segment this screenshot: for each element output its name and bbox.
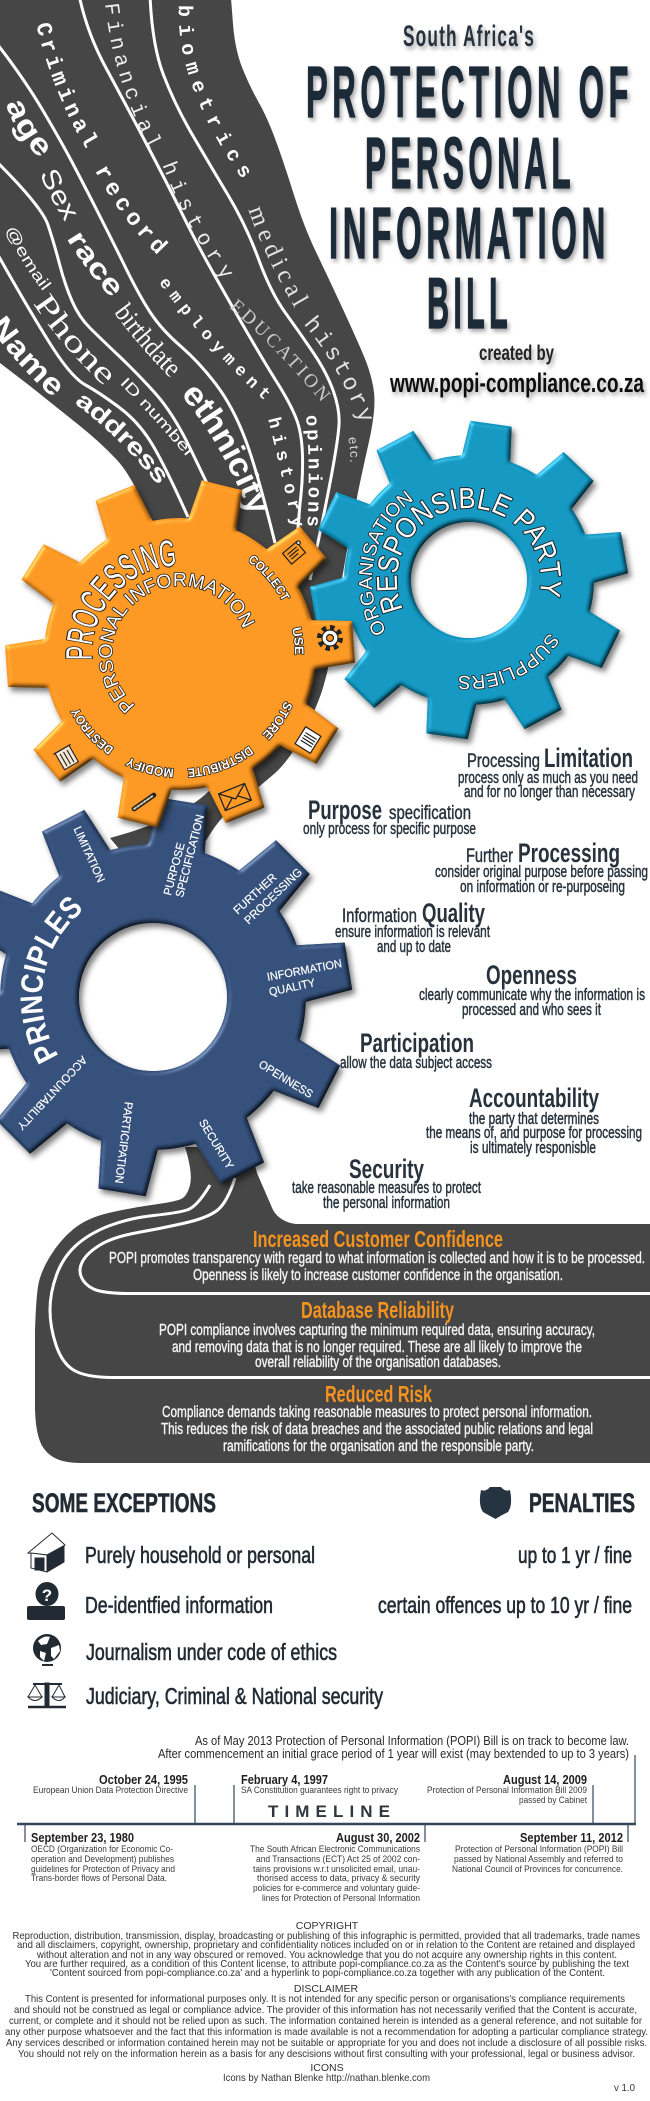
gear shape — [309, 420, 629, 740]
principle: further processing — [435, 838, 648, 896]
event: september 11 2012: National Council of Provinces for concurrence. — [452, 1864, 623, 1875]
step labels: STORE — [262, 701, 292, 741]
heading: some exceptions: SOME EXCEPTIONS — [32, 1488, 216, 1518]
panel: timeline — [17, 1734, 636, 1904]
disclaimer: DISCLAIMER — [294, 1983, 359, 1995]
event: september 11 2012: Protection of Personal Information (POPI) Bill — [455, 1844, 623, 1855]
ribbon words: record — [96, 166, 168, 254]
ribbon shape — [35, 1147, 650, 1463]
principle: participation — [340, 1028, 492, 1072]
event: september 23 1980: guidelines for Protection of Privacy and — [31, 1864, 175, 1875]
version: v 1.0 — [614, 2082, 635, 2094]
event: august 30 2002: policies for e-commerce and voluntary guide- — [253, 1883, 420, 1894]
event: august 30 2002: The South African Electronic Communications — [250, 1844, 420, 1855]
principle: accountability: is ultimately responisble — [470, 1139, 596, 1157]
principle: accountability — [426, 1083, 642, 1157]
stream shape — [0, 0, 374, 850]
tooth labels: SPECIFICATION — [174, 813, 207, 899]
gear shape — [5, 479, 355, 829]
step labels: MODIFY — [124, 758, 174, 778]
icon credits — [223, 2062, 430, 2084]
event: august 30 2002 — [250, 1831, 420, 1904]
event: august 14 2009: August 14, 2009 — [503, 1773, 587, 1787]
ribbon words: @email — [6, 228, 52, 290]
event: february 4 1997: SA Constitution guarantees right to privacy — [241, 1785, 398, 1796]
event: august 14 2009: Protection of Personal Information Bill 2009 — [427, 1785, 587, 1796]
ribbon words: employment — [160, 279, 270, 400]
principle: openness — [419, 960, 645, 1019]
principle: purpose specification: only process for specific purpose — [303, 820, 476, 838]
principle: security: Security — [349, 1154, 424, 1184]
event: august 14 2009 — [427, 1773, 587, 1806]
icon: anonymous person: ? — [42, 1586, 52, 1605]
exception: judiciary: Judiciary, Criminal & National security — [86, 1683, 383, 1709]
gear heading: processing: PROCESSING — [65, 539, 176, 659]
icon: house — [28, 1533, 65, 1572]
gear heading: principles: PRINCIPLES — [20, 897, 81, 1064]
ribbon words: Financial — [105, 4, 162, 148]
ribbon words — [0, 4, 372, 526]
disclaimer — [5, 1983, 648, 2060]
principle: processing limitation: Processing — [467, 751, 540, 772]
timeline heading: TIMELINE — [268, 1802, 390, 1821]
event: august 30 2002: August 30, 2002 — [336, 1831, 420, 1845]
icon: scales of justice — [28, 1683, 66, 1707]
gear labels: SUPPLIERS — [458, 634, 559, 690]
icon credits: Icons by Nathan Blenke http://nathan.blenke.com — [223, 2072, 430, 2084]
panel: principle descriptions — [292, 743, 648, 1212]
event: september 23 1980 — [31, 1831, 175, 1884]
event: september 23 1980: Trans-border flows of Personal Data. — [31, 1873, 167, 1884]
event: september 11 2012 — [452, 1831, 623, 1875]
ribbon words: history — [304, 314, 372, 419]
event: february 4 1997 — [241, 1773, 398, 1796]
icon: shield — [480, 1487, 511, 1519]
tooth labels: INFORMATION — [266, 958, 343, 984]
event: august 30 2002: lines for Protection of Personal Information — [262, 1893, 420, 1904]
tooth labels — [14, 813, 343, 1184]
exception: journalism: Journalism under code of ethics — [86, 1639, 337, 1665]
principle: accountability: the party that determines — [469, 1110, 599, 1128]
tooth labels: FURTHER — [232, 872, 279, 917]
principle: security — [292, 1154, 481, 1212]
icon credits: ICONS — [310, 2062, 344, 2074]
icon: distribute envelope — [219, 783, 251, 811]
gear labels: ORGANISATION — [358, 490, 414, 636]
ribbon words: Sex — [42, 170, 76, 222]
tooth labels: SECURITY — [196, 1117, 235, 1172]
copyright: COPYRIGHT — [296, 1920, 359, 1932]
ribbon words: EDUCATION — [230, 298, 331, 401]
panel: penalties — [378, 1487, 635, 1618]
principle: openness: Openness — [486, 960, 577, 990]
copyright: 'Content sourced from popi-compliance.co.za' and a hyperlink to popi-compliance.co.za together with any publication of the Content. — [50, 1967, 605, 1979]
step labels: DISTRIBUTE — [186, 746, 254, 778]
title: Protection of Personal Information Bill: BILL — [427, 264, 512, 344]
ribbon words: history — [268, 417, 302, 526]
tooth labels: QUALITY — [268, 977, 317, 999]
title: Protection of Personal Information Bill — [306, 53, 633, 344]
ribbon words: etc. — [348, 438, 358, 462]
event: september 23 1980: OECD (Organization for Economic Co- — [31, 1844, 173, 1855]
principle: participation: allow the data subject access — [340, 1054, 492, 1072]
benefit: database reliability: Database Reliability — [301, 1297, 454, 1323]
event: october 24 1995 — [33, 1773, 188, 1796]
benefit: reduced risk: Reduced Risk — [325, 1381, 432, 1407]
event: october 24 1995: October 24, 1995 — [99, 1773, 188, 1787]
intro text — [158, 1734, 629, 1761]
event: september 11 2012: September 11, 2012 — [520, 1831, 623, 1845]
icon: globe — [33, 1634, 61, 1665]
event: august 30 2002: thorised access to data, privacy & security — [257, 1873, 420, 1884]
event: october 24 1995: European Union Data Protection Directive — [33, 1785, 188, 1796]
title: South Africa's: South Africa's — [403, 20, 535, 53]
gear: principles — [0, 799, 359, 1204]
ribbon words: race — [68, 232, 120, 296]
event: september 23 1980: operation and Development) publishes — [31, 1854, 174, 1865]
event: august 30 2002: tains provisions w.r.t unsolicited email, unau- — [253, 1864, 420, 1875]
title block — [306, 20, 645, 398]
panel: legal footer — [5, 1920, 648, 2094]
icon: modify wrench — [134, 795, 154, 809]
tooth labels: PURPOSE — [162, 841, 188, 897]
copyright — [12, 1920, 640, 1979]
gear: processing personal information — [4, 480, 362, 834]
benefit: reduced risk: ramifications for the organisation and the responsible party. — [223, 1438, 534, 1455]
principle: information quality: Quality — [422, 898, 485, 928]
ribbon dividers — [50, 1178, 650, 1378]
gear shape — [0, 797, 353, 1197]
gear: responsible party — [310, 420, 634, 747]
gear subheading: personal information: PERSONAL INFORMATION — [98, 572, 256, 714]
principle: information quality: and up to date — [377, 938, 451, 956]
event: september 11 2012: passed by National Assembly and referred to — [454, 1854, 623, 1865]
event: september 23 1980: September 23, 1980 — [31, 1831, 134, 1845]
principle: purpose specification: Purpose — [308, 795, 382, 825]
tooth labels: PARTICIPATION — [112, 1101, 134, 1184]
principle: information quality: ensure information is relevant — [335, 923, 490, 941]
created by: created by — [479, 342, 554, 365]
principle: further processing: Further — [466, 846, 514, 867]
tooth labels: OPENNESS — [256, 1059, 315, 1101]
step labels — [70, 555, 304, 778]
ribbon words: Criminal — [37, 23, 98, 148]
benefit: database reliability — [159, 1297, 595, 1371]
step labels: COLLECT — [248, 555, 291, 600]
ribbon words: history — [163, 161, 232, 276]
tooth labels: LIMITATION — [71, 825, 106, 885]
ribbon words: ethnicity — [184, 387, 265, 510]
principle: purpose specification — [303, 795, 476, 838]
ribbon words: biometrics — [178, 6, 250, 177]
benefit: increased customer confidence — [109, 1226, 645, 1284]
ribbon words: medical — [248, 206, 309, 308]
principle: security: take reasonable measures to protect — [292, 1179, 481, 1197]
ribbon words: opinions — [303, 416, 323, 526]
icon: use cog — [320, 628, 340, 648]
principle: information quality: Information — [342, 906, 417, 927]
event: august 14 2009: passed by Cabinet — [519, 1795, 587, 1806]
principle: processing limitation — [458, 743, 638, 801]
step labels: USE — [292, 626, 304, 656]
ribbon words: Phone — [34, 292, 112, 384]
benefit: reduced risk — [161, 1381, 593, 1455]
gear labels: RESPONSIBLE PARTY — [376, 487, 562, 614]
benefit: database reliability: overall reliability of the organisation databases. — [255, 1354, 501, 1371]
icon: store document — [295, 727, 321, 753]
principle: accountability: Accountability — [469, 1083, 599, 1113]
ribbon words: address — [76, 396, 166, 483]
event: february 4 1997: February 4, 1997 — [241, 1773, 328, 1787]
tooth labels: ACCOUNTABILITY — [14, 1053, 89, 1132]
panel: some exceptions — [27, 1488, 383, 1709]
ribbon words: ID number — [120, 378, 194, 456]
gear labels — [358, 487, 562, 690]
icon: destroy bin — [53, 744, 80, 771]
benefits ribbon shape — [35, 1147, 650, 1463]
event: august 30 2002: and Transactions (ECT) Act 25 of 2002 con- — [256, 1854, 420, 1865]
principle: purpose specification: specification — [389, 803, 471, 824]
principle: security: the personal information — [323, 1194, 450, 1212]
ribbon words: age — [7, 101, 48, 156]
principle: participation: Participation — [360, 1028, 474, 1058]
ribbon dividers — [0, 0, 339, 580]
data stream: personal information ribbon — [0, 0, 374, 848]
icon: collect clipboard — [283, 540, 308, 564]
tooth labels: PROCESSING — [243, 866, 305, 927]
panel: benefits text — [109, 1226, 645, 1455]
ribbon words: birthdate — [115, 301, 178, 377]
icon: anonymous person — [27, 1582, 65, 1620]
step labels: DESTROY — [70, 709, 114, 756]
exception: household: Purely household or personal — [85, 1542, 315, 1568]
exception: de-identified: De-identfied information — [85, 1592, 273, 1618]
benefit: increased customer confidence: Increased Customer Confidence — [253, 1226, 503, 1252]
principle: information quality — [335, 898, 490, 956]
timeline axis and ticks — [17, 1755, 636, 1842]
